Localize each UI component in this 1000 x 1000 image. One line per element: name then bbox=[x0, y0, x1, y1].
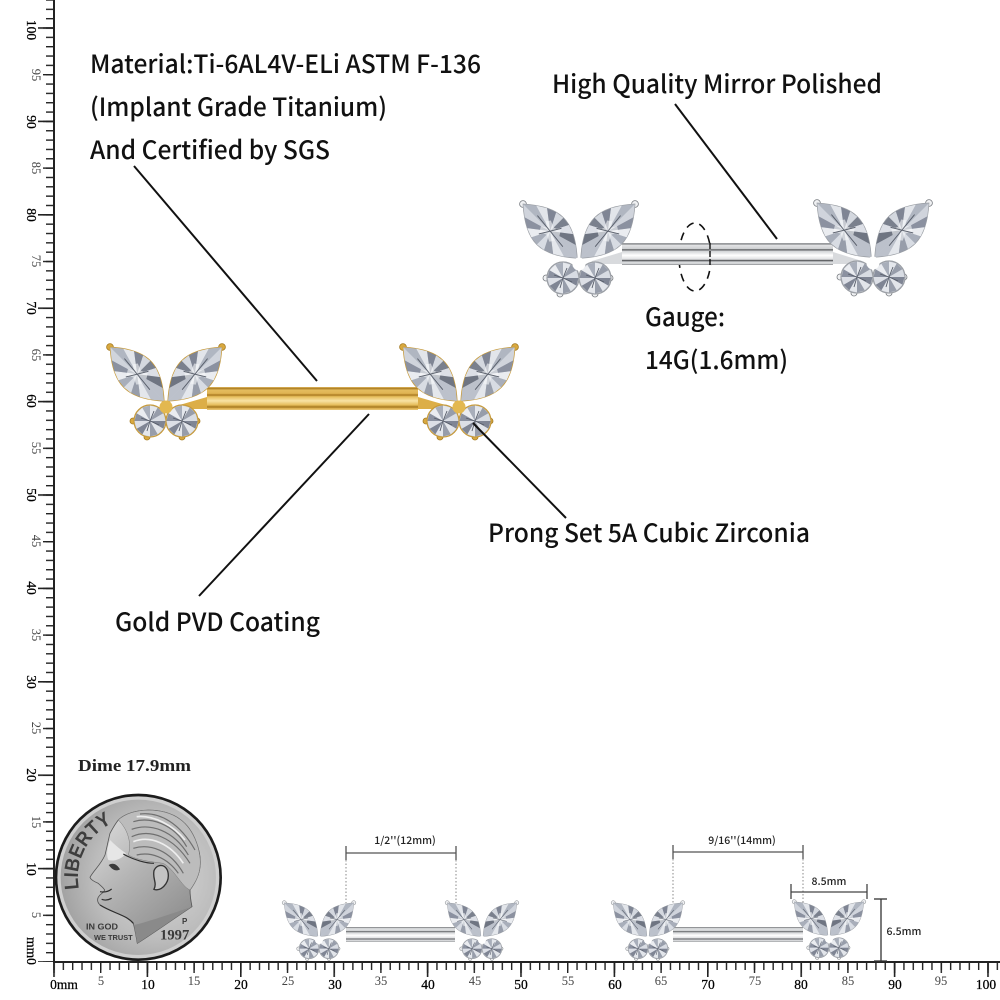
horizontal ruler: 85 bbox=[842, 974, 854, 988]
vertical ruler: 95 bbox=[29, 69, 43, 81]
horizontal ruler: 10 bbox=[141, 977, 155, 992]
horizontal ruler: 15 bbox=[188, 974, 200, 988]
coin inscriptions: motto and date: 1997 bbox=[160, 927, 189, 943]
dime coin bbox=[55, 794, 222, 961]
dimension: 12mm bbox=[346, 833, 456, 903]
vertical ruler bbox=[24, 0, 55, 965]
portrait bbox=[90, 810, 200, 943]
horizontal ruler: 75 bbox=[749, 974, 761, 988]
vertical ruler: 40 bbox=[24, 581, 39, 595]
horizontal ruler: 60 bbox=[608, 977, 622, 992]
horizontal ruler bbox=[50, 961, 1000, 992]
horizontal ruler: 30 bbox=[328, 977, 342, 992]
horizontal ruler: 100 bbox=[976, 977, 996, 992]
vertical ruler: 45 bbox=[29, 535, 43, 547]
silver barbell bbox=[510, 190, 942, 297]
dimension: 6.5mm bbox=[874, 899, 922, 961]
coin inscriptions: motto and date: WE TRUST bbox=[94, 933, 133, 942]
gauge dashed ring bbox=[679, 223, 711, 291]
small barbell 12mm bbox=[276, 895, 525, 960]
coin inscriptions: motto and date: P bbox=[182, 917, 188, 926]
vertical ruler: 65 bbox=[29, 349, 43, 361]
horizontal ruler: 0mm bbox=[50, 977, 78, 992]
leader line: mirror polished bbox=[675, 104, 777, 239]
vertical ruler: 70 bbox=[24, 301, 39, 315]
vertical ruler: 55 bbox=[29, 442, 43, 454]
vertical ruler: 35 bbox=[29, 629, 43, 641]
horizontal ruler: 55 bbox=[562, 974, 574, 988]
gold barbell bbox=[97, 334, 528, 440]
leader line: gold coating bbox=[199, 414, 369, 596]
horizontal ruler: 35 bbox=[375, 974, 387, 988]
horizontal ruler: 40 bbox=[421, 977, 435, 992]
vertical ruler: 30 bbox=[24, 675, 39, 689]
material callout text: (Implant Grade Titanium) bbox=[90, 88, 387, 124]
horizontal ruler: 95 bbox=[935, 974, 947, 988]
vertical ruler: mm0 bbox=[24, 937, 39, 965]
mirror polished callout text: High Quality Mirror Polished bbox=[552, 65, 882, 101]
vertical ruler: 5 bbox=[29, 912, 43, 918]
horizontal ruler: 50 bbox=[514, 977, 528, 992]
leader line: zirconia bbox=[473, 423, 566, 518]
small barbell 14mm bbox=[605, 894, 872, 960]
vertical ruler: 15 bbox=[29, 816, 43, 828]
vertical ruler: 100 bbox=[24, 20, 39, 40]
vertical ruler: 60 bbox=[24, 394, 39, 408]
vertical ruler: 25 bbox=[29, 722, 43, 734]
gauge text: 14G(1.6mm) bbox=[645, 341, 788, 377]
gold coating callout text: Gold PVD Coating bbox=[115, 603, 321, 639]
horizontal ruler: 65 bbox=[655, 974, 667, 988]
vertical ruler: 75 bbox=[29, 255, 43, 267]
material callout text bbox=[90, 45, 481, 167]
dimension: 14mm: 9/16''(14mm) bbox=[708, 833, 776, 848]
dimension: 12mm: 1/2''(12mm) bbox=[374, 833, 436, 848]
dimension: 8.5mm: 8.5mm bbox=[812, 874, 847, 889]
zirconia callout text: Prong Set 5A Cubic Zirconia bbox=[488, 514, 810, 550]
dimension: 8.5mm bbox=[791, 874, 867, 899]
vertical ruler: 20 bbox=[24, 768, 39, 782]
gauge text: Gauge: bbox=[645, 298, 725, 334]
horizontal ruler: 5 bbox=[98, 974, 104, 988]
vertical ruler: 90 bbox=[24, 115, 39, 129]
horizontal ruler: 90 bbox=[888, 977, 902, 992]
horizontal ruler: 25 bbox=[282, 974, 294, 988]
coin inscription: LIBERTY: LIBERTY bbox=[64, 811, 108, 890]
vertical ruler: 85 bbox=[29, 162, 43, 174]
gauge ring front edge bbox=[709, 243, 711, 266]
horizontal ruler: 70 bbox=[701, 977, 715, 992]
vertical ruler: 80 bbox=[24, 208, 39, 222]
horizontal ruler: 80 bbox=[794, 977, 808, 992]
coin inscriptions: motto and date: IN GOD bbox=[86, 922, 118, 931]
coin inscriptions: motto and date bbox=[86, 917, 189, 943]
dime label: Dime 17.9mm bbox=[78, 756, 191, 775]
dimension: 6.5mm: 6.5mm bbox=[887, 924, 922, 939]
leader line: material bbox=[134, 166, 317, 381]
horizontal ruler: 45 bbox=[469, 974, 481, 988]
vertical ruler: 50 bbox=[24, 488, 39, 502]
vertical ruler: 10 bbox=[24, 862, 39, 876]
material callout text: Material:Ti-6AL4V-ELi ASTM F-136 bbox=[90, 45, 481, 81]
material callout text: And Certified by SGS bbox=[90, 131, 330, 167]
dimension: 14mm bbox=[673, 833, 803, 903]
gauge text bbox=[645, 298, 788, 377]
horizontal ruler: 20 bbox=[234, 977, 248, 992]
